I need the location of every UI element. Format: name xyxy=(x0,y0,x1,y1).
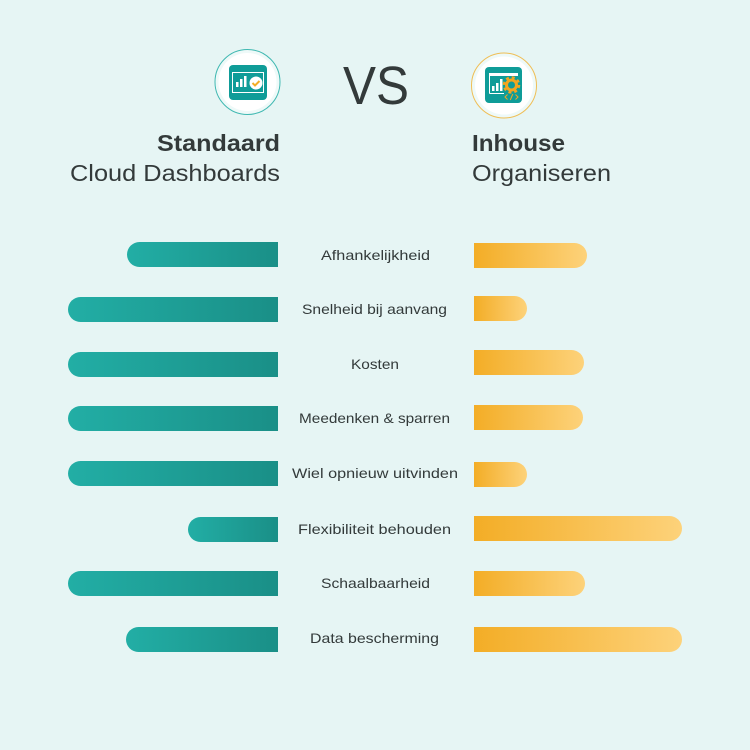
vs heading: VS xyxy=(343,56,409,116)
icon: inhouse dashboard xyxy=(472,53,536,118)
row labels: Snelheid bij aanvang xyxy=(302,301,447,317)
right heading: Inhouse xyxy=(472,130,565,156)
left heading: Standaard xyxy=(157,130,280,156)
row labels: Data bescherming xyxy=(310,630,439,646)
row labels: Schaalbaarheid xyxy=(321,575,430,591)
row labels: Flexibiliteit behouden xyxy=(298,521,451,537)
right bars xyxy=(474,243,682,652)
row labels: Wiel opnieuw uitvinden xyxy=(292,465,458,481)
row labels: Kosten xyxy=(351,356,399,372)
left heading xyxy=(70,130,280,186)
row labels: Meedenken & sparren xyxy=(299,410,450,426)
row labels xyxy=(292,247,458,646)
left bars xyxy=(68,242,278,652)
row labels: Afhankelijkheid xyxy=(321,247,430,263)
right heading: Organiseren xyxy=(472,160,611,186)
icon: standard dashboard xyxy=(215,50,280,114)
right heading xyxy=(472,130,611,186)
left heading: Cloud Dashboards xyxy=(70,160,280,186)
